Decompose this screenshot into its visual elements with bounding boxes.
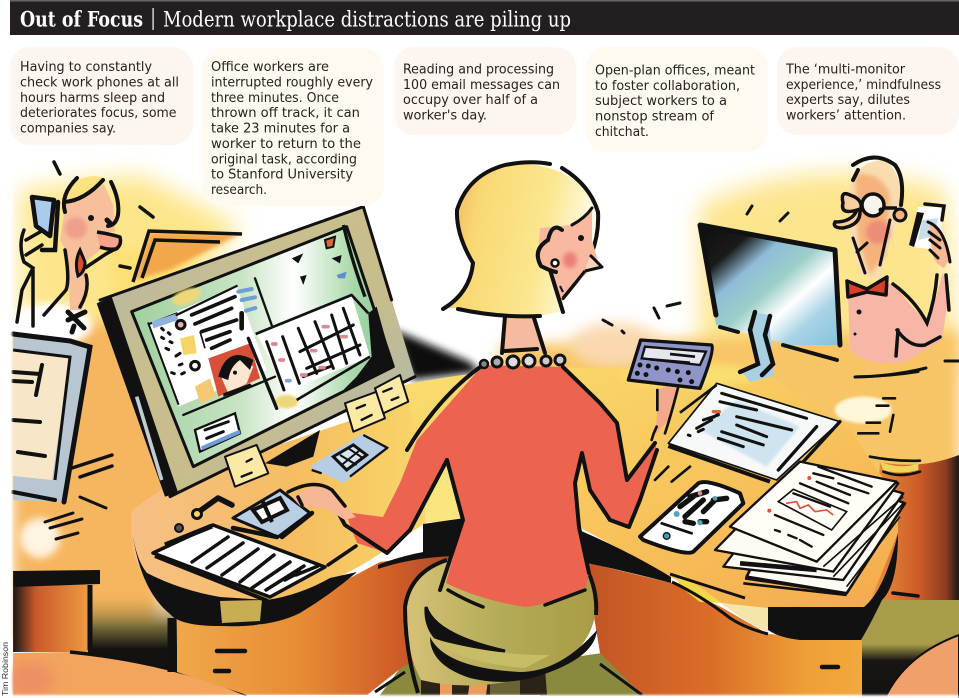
face lines [853, 220, 890, 273]
panel: multi-monitor callout: workers’ attention. [786, 108, 906, 124]
screen portrait [208, 343, 260, 397]
monitor frame [100, 207, 415, 497]
panel: email callout: worker's day. [403, 108, 487, 124]
screen lower note [195, 413, 240, 452]
arm lines [893, 275, 949, 356]
neck [500, 316, 545, 352]
panel: interruptions callout: research. [211, 182, 267, 198]
panel: email callout: 100 email messages can [403, 77, 560, 93]
screen right panel [257, 295, 370, 392]
title bar: Modern workplace distractions are piling up [163, 8, 571, 32]
panel: multi-monitor callout: experts say, dilutes [786, 92, 910, 108]
glasses [834, 194, 861, 228]
bow tie [847, 277, 887, 297]
panel: phones callout: Having to constantly [20, 59, 152, 75]
panel: email callout: occupy over half of a [403, 92, 538, 108]
panel: multi-monitor callout: experience,’ mindfulness [786, 77, 941, 93]
hand [930, 222, 949, 268]
arms and torso [345, 365, 657, 607]
keyboard and tablet [153, 490, 325, 601]
title bar: Out of Focus [20, 6, 143, 32]
right monitor [603, 206, 840, 382]
sticky notes [225, 375, 408, 487]
necklace [480, 355, 565, 368]
floor olive patches [380, 653, 645, 698]
small keypad [310, 433, 388, 483]
desk top [131, 363, 898, 640]
panel: multi-monitor callout: The ‘multi-monitor [785, 62, 905, 78]
phone [32, 197, 54, 236]
screen icons [292, 253, 342, 285]
background colour glows [8, 173, 959, 640]
right man on phone [834, 158, 959, 377]
monitor screen [132, 227, 393, 467]
panel: interruptions callout: interrupted roughly every [211, 74, 373, 90]
stack of papers [715, 462, 905, 595]
right side cabinet [870, 455, 959, 605]
desk items on right [640, 345, 920, 595]
panel: interruptions callout: three minutes. Once [211, 90, 339, 106]
hand-held device [628, 340, 712, 440]
left partial monitor [13, 334, 112, 539]
central monitor [97, 207, 415, 497]
panel: interruptions callout: worker to return to the [211, 136, 361, 152]
panel: interruptions callout: take 23 minutes for a [211, 120, 350, 136]
panel: multi-monitor callout [777, 47, 959, 135]
desk front panels [172, 552, 918, 696]
left small desk [13, 570, 178, 672]
monitor stand [265, 430, 320, 467]
page margin edges [0, 160, 959, 698]
panel: phones callout [10, 47, 193, 145]
picture frame behind monitor [133, 231, 242, 282]
phone [912, 207, 944, 250]
panel: email callout: Reading and processing [403, 62, 554, 78]
illustration: office scene [0, 158, 959, 698]
panel: phones callout: hours harms sleep and [20, 90, 165, 106]
smartphone [640, 467, 743, 553]
screen left panel [148, 287, 267, 407]
mouth [76, 250, 85, 276]
panel: open-plan callout: chitchat. [595, 124, 649, 140]
title bar [10, 0, 959, 35]
panel: email callout [394, 47, 576, 135]
panel: interruptions callout: Office workers are [211, 59, 329, 75]
woman at desk [288, 162, 712, 695]
tablet [668, 383, 840, 482]
floor and dark area lower right [861, 600, 959, 698]
panel: interruptions callout: original task, according [211, 152, 357, 168]
panel: open-plan callout [586, 47, 768, 152]
collar [68, 312, 85, 332]
panel: open-plan callout: nonstop stream of [595, 108, 715, 124]
panel: interruptions callout [202, 48, 384, 206]
panel: phones callout: companies say. [20, 120, 116, 136]
panel: open-plan callout: to foster collaboration, [595, 78, 740, 94]
left person on phone [17, 162, 153, 332]
panel: open-plan callout: Open-plan offices, meant [595, 62, 755, 78]
panel: interruptions callout: thrown off track, it can [211, 105, 360, 121]
desk black edge left [132, 530, 357, 626]
desk black edge right [579, 530, 671, 583]
desk lines on right [835, 397, 892, 423]
face [538, 208, 600, 300]
bottom left chair shape [6, 652, 247, 698]
hair [447, 163, 598, 316]
skirt and stool [405, 560, 597, 695]
hand on keyboard [293, 486, 356, 520]
panel: open-plan callout: subject workers to a [595, 93, 727, 109]
panel: interruptions callout: to Stanford University [211, 166, 353, 182]
panel: phones callout: deteriorates focus, some [20, 105, 176, 121]
credit: Tim Robinson [0, 642, 10, 696]
shadow behind monitor [395, 330, 480, 380]
panel: phones callout: check work phones at all [20, 74, 179, 90]
nose [97, 232, 120, 249]
